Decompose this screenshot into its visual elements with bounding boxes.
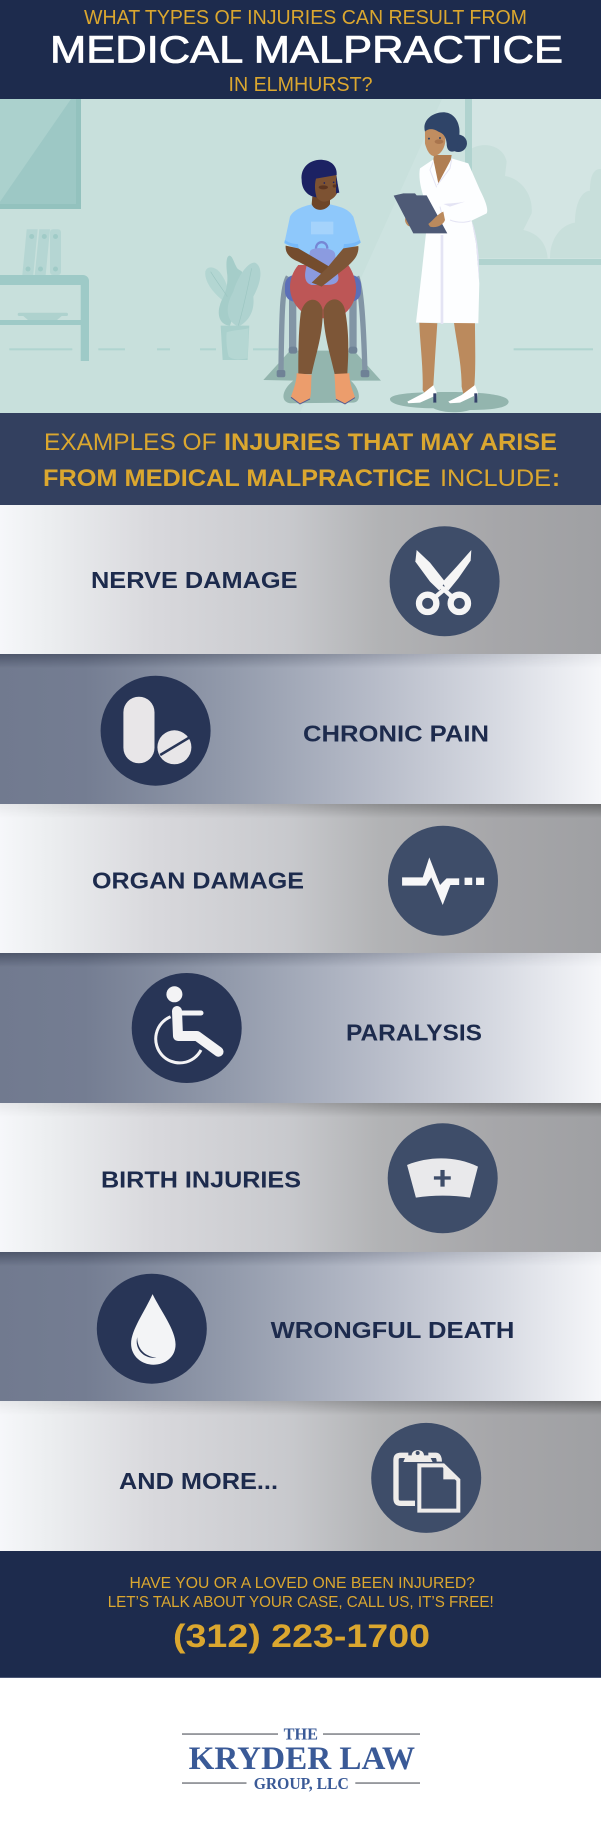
title: MEDICAL MALPRACTICE	[50, 30, 563, 72]
icon: clipboard and document	[371, 1423, 481, 1533]
band: and more	[0, 1401, 601, 1551]
wall picture frame	[0, 99, 81, 209]
phone number: (312) 223-1700	[173, 1618, 430, 1654]
label: AND MORE...	[119, 1468, 278, 1494]
band: organ damage	[0, 804, 601, 953]
band: paralysis	[0, 953, 601, 1103]
seated patient	[263, 160, 381, 404]
side table	[0, 275, 89, 361]
header banner	[0, 0, 601, 99]
label: NERVE DAMAGE	[91, 567, 298, 593]
window	[465, 99, 601, 265]
band: birth injuries	[0, 1103, 601, 1252]
sub-heading line 1: EXAMPLES OF	[44, 429, 216, 456]
heading line: what types: WHAT TYPES OF INJURIES CAN RESULT FROM	[84, 7, 527, 29]
logo: The Kryder Law Group, LLC	[182, 1724, 420, 1793]
heading line: location: IN ELMHURST?	[228, 74, 372, 96]
sub-heading banner	[0, 413, 601, 505]
call to action line 2: LET’S TALK ABOUT YOUR CASE, CALL US, IT’S FREE!	[108, 1594, 494, 1611]
sub-heading line 1	[44, 429, 557, 456]
label: ORGAN DAMAGE	[92, 868, 304, 894]
potted plant	[205, 256, 260, 360]
icon: scissors	[390, 526, 500, 636]
logo: The Kryder Law Group, LLC: THE	[284, 1724, 318, 1743]
call to action line 1: HAVE YOU OR A LOVED ONE BEEN INJURED?	[130, 1575, 475, 1592]
band: chronic pain	[0, 654, 601, 804]
floor line dashes	[9, 348, 593, 350]
sub-heading line 2: FROM MEDICAL MALPRACTICE	[43, 465, 430, 492]
footer call to action	[0, 1551, 601, 1678]
label: BIRTH INJURIES	[101, 1167, 301, 1193]
logo: The Kryder Law Group, LLC: KRYDER LAW	[189, 1741, 415, 1777]
icon: heartbeat	[388, 826, 498, 936]
band: wrongful death	[0, 1252, 601, 1401]
illustration: doctor's office scene	[0, 99, 601, 413]
icon: nurse cap	[388, 1123, 498, 1233]
binders	[22, 229, 61, 275]
label: CHRONIC PAIN	[303, 721, 489, 747]
sub-heading line 2: :	[552, 465, 560, 492]
doctor with clipboard	[390, 112, 509, 412]
label: WRONGFUL DEATH	[271, 1317, 514, 1343]
icon: pills	[101, 676, 211, 786]
icon: drop	[97, 1274, 207, 1384]
label: PARALYSIS	[346, 1020, 482, 1046]
logo: The Kryder Law Group, LLC: GROUP, LLC	[254, 1774, 349, 1793]
sub-heading line 1: INJURIES THAT MAY ARISE	[224, 429, 557, 456]
icon: wheelchair	[132, 973, 242, 1083]
sub-heading line 2: INCLUDE	[440, 465, 551, 492]
band: nerve damage	[0, 505, 601, 654]
